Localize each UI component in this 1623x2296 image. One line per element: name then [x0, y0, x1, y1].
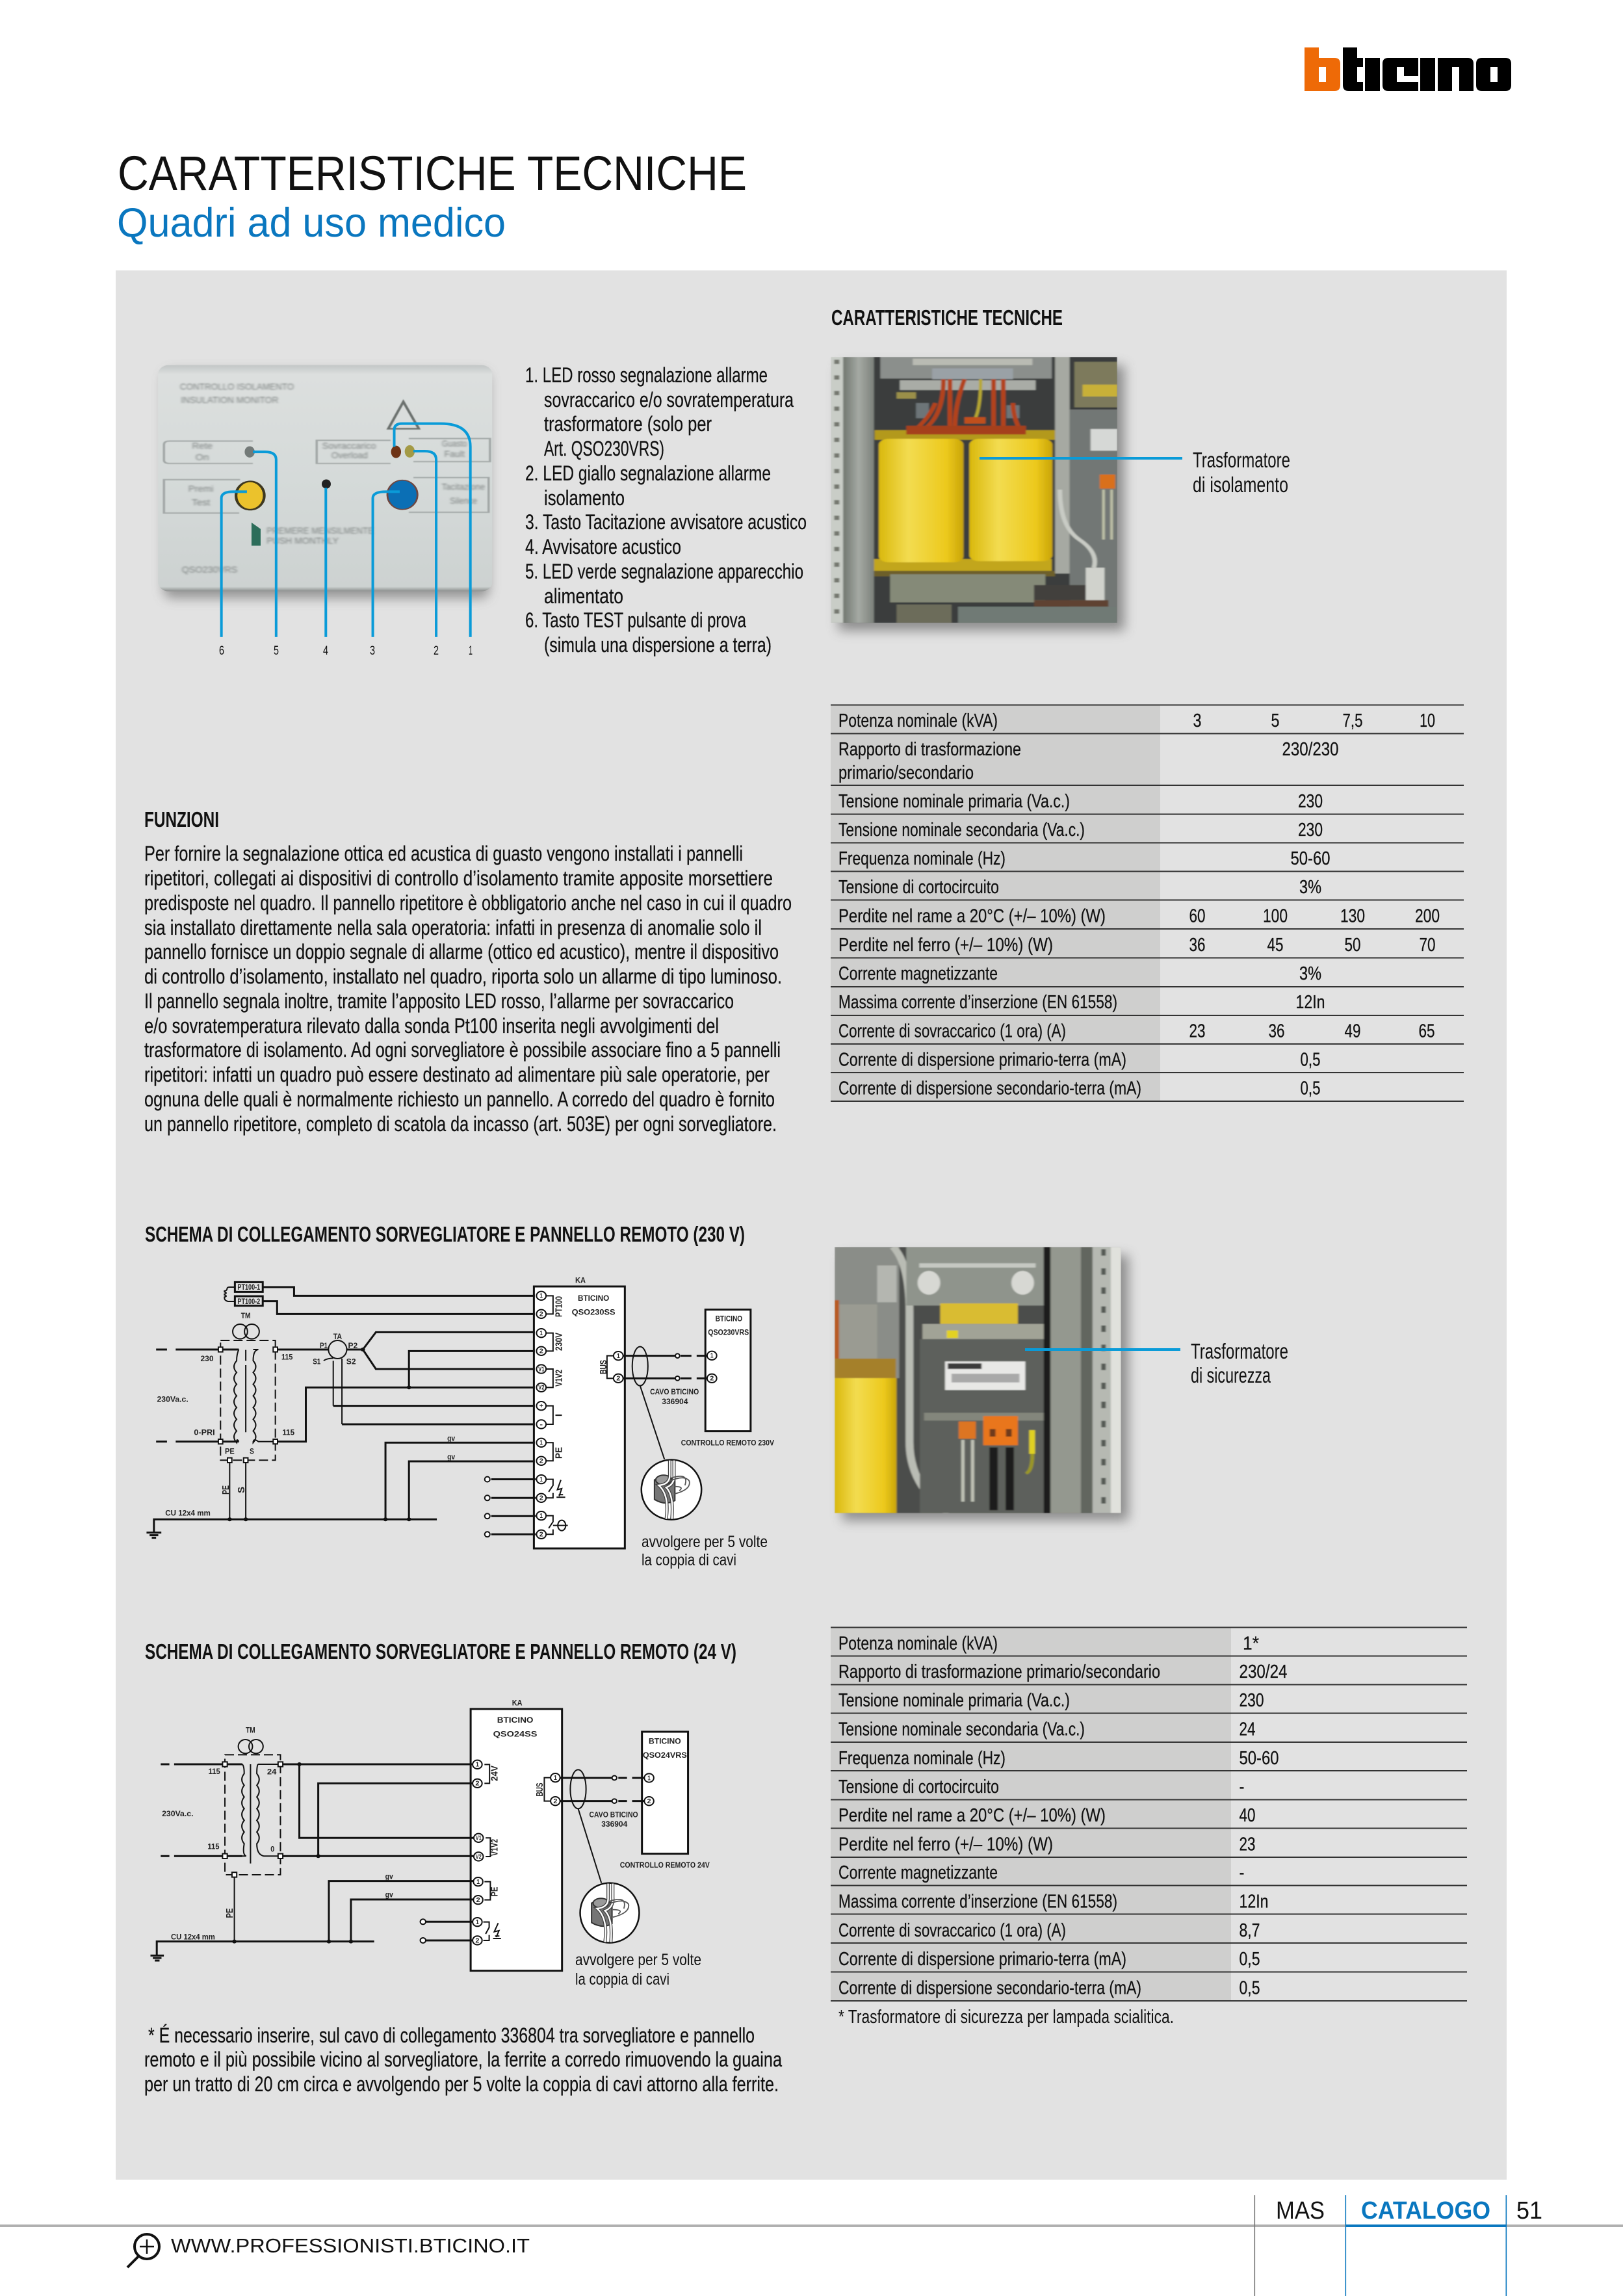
table: isolation transformer specifications: 0,5 — [1300, 1078, 1321, 1099]
text block: numbered legend: (simula una dispersione a terra) — [544, 633, 772, 657]
table: isolation transformer specifications: Tensione nominale secondaria (Va.c.) — [838, 820, 1085, 841]
wiring diagram: 230 V: 2 — [539, 1348, 543, 1355]
wiring diagram: 24 V: 1 — [476, 1761, 479, 1768]
device photo: insulation monitor panel: Premi — [188, 484, 213, 494]
device photo: insulation monitor panel: PREMERE MENSILMENTE — [266, 526, 374, 536]
wiring diagram: 24 V: BTICINO — [649, 1736, 681, 1745]
table: safety transformer specifications: 0,5 — [1239, 1977, 1260, 1998]
device photo: insulation monitor panel: On — [196, 452, 209, 462]
table: isolation transformer specifications: 7,5 — [1343, 711, 1362, 731]
wiring diagram: 230 V: CU 12x4 mm — [165, 1509, 211, 1517]
wiring diagram: 230 V: - — [539, 1421, 543, 1428]
wiring diagram: 230 V: 1 — [539, 1439, 543, 1446]
wiring diagram: 24 V: 1 — [476, 1919, 479, 1926]
subtitle: Quadri ad uso medico — [117, 200, 506, 246]
table: safety transformer specifications: - — [1239, 1777, 1244, 1797]
wiring diagram: 230 V: 230 — [200, 1355, 214, 1363]
table: safety transformer specifications: Frequenza nominale (Hz) — [838, 1748, 1006, 1769]
table: isolation transformer specifications: 5 — [1271, 711, 1279, 731]
table: safety transformer specifications: 12In — [1239, 1892, 1269, 1912]
wiring diagram: 24 V: QSO24VRS — [643, 1751, 687, 1760]
callout: trasformatore di isolamento — [980, 448, 1290, 497]
wiring diagram: 24 V: 2 — [476, 1897, 480, 1904]
table: isolation transformer specifications: Frequenza nominale (Hz) — [838, 848, 1006, 869]
table: isolation transformer specifications: Rapporto di trasformazione — [838, 739, 1021, 760]
photo: isolation transformer — [831, 357, 1124, 631]
callout: trasformatore di sicurezza — [1025, 1339, 1288, 1387]
wiring diagram: 230 V: 230V — [554, 1333, 565, 1351]
table: safety transformer specifications: Corrente di dispersione primario-terra (mA) — [838, 1949, 1126, 1970]
device photo: insulation monitor panel: Rete — [192, 441, 213, 451]
heading: caratteristiche tecniche: CARATTERISTICHE TECNICHE — [831, 306, 1063, 330]
table: isolation transformer specifications: Tensione nominale primaria (Va.c.) — [838, 791, 1070, 812]
wiring diagram: 24 V: 1 — [476, 1879, 480, 1886]
callout numbers: 5 — [274, 644, 279, 658]
table: isolation transformer specifications: 23 — [1189, 1021, 1205, 1041]
wiring diagram: 24 V: V1V2 — [489, 1839, 500, 1856]
table: safety transformer specifications: Corrente di dispersione secondario-terra (mA) — [838, 1977, 1141, 1998]
wiring diagram: 24 V: 0 — [270, 1845, 274, 1853]
table: safety transformer specifications: 230/24 — [1239, 1662, 1287, 1682]
table: isolation transformer specifications — [831, 705, 1464, 1101]
table: safety transformer specifications: Tensione nominale secondaria (Va.c.) — [838, 1719, 1085, 1740]
device photo: insulation monitor panel: INSULATION MONITOR — [181, 395, 278, 405]
wiring diagram: 24 V: 1 — [647, 1775, 651, 1782]
text block: funzioni: trasformatore di isolamento. Ad ogni sorvegliatore è possibile associare fino a 5 pannelli — [144, 1038, 781, 1062]
wiring diagram: 230 V: P2 — [348, 1342, 357, 1350]
wiring diagram: 230 V: 2 — [710, 1375, 714, 1382]
wiring diagram: 230 V: 2 — [539, 1531, 543, 1538]
wiring diagram: 24 V: TM — [246, 1726, 255, 1734]
wiring diagram: 24 V: CAVO BTICINO — [589, 1810, 638, 1819]
wiring diagram: 24 V: 115 — [207, 1842, 220, 1851]
text block: funzioni: ripetitori: infatti un quadro può essere destinato ad alimentare più sale operatorie, per — [144, 1063, 770, 1086]
text block: numbered legend: trasformatore (solo per — [544, 412, 712, 436]
table: isolation transformer specifications: 50-60 — [1291, 848, 1330, 869]
text block: cable note: remoto e il più possibile vicino al sorvegliatore, la ferrite a corredo rimuovendo la guaina — [144, 2048, 782, 2071]
wiring diagram: 230 V: 0-PRI — [194, 1428, 215, 1437]
wiring diagram: 24 V: avvolgere per 5 volte — [575, 1951, 701, 1969]
wiring diagram: 24 V: la coppia di cavi — [575, 1970, 669, 1989]
wiring diagram: 24 V: 2 — [475, 1780, 480, 1787]
wiring diagram: 230 V: 115 — [282, 1428, 294, 1437]
wiring diagram: 24 V: 115 — [209, 1767, 220, 1776]
text block: numbered legend: sovraccarico e/o sovratemperatura — [544, 388, 794, 411]
wiring diagram: 24 V: PE — [224, 1909, 235, 1918]
wiring diagram: 230 V: PT100-2 — [237, 1298, 260, 1306]
wiring diagram: 230 V: avvolgere per 5 volte — [642, 1533, 768, 1551]
text block: numbered legend: 2. LED giallo segnalazione allarme — [525, 462, 771, 485]
panel: grey background — [116, 270, 1507, 2180]
wiring diagram: 230 V: 1 — [710, 1352, 714, 1359]
wiring diagram: 230 V: QSO230SS — [572, 1308, 616, 1316]
logo: bticino — [1305, 47, 1511, 91]
table: safety transformer specifications: 24 — [1239, 1719, 1256, 1740]
wiring diagram: 230 V: 115 — [281, 1353, 293, 1362]
footer: MAS — [1276, 2197, 1325, 2224]
device photo: insulation monitor panel: Guasto — [442, 439, 467, 449]
table: safety transformer specifications: 23 — [1239, 1834, 1256, 1855]
wiring diagram: 24 V: QSO24SS — [493, 1730, 538, 1738]
device photo: insulation monitor panel: PUSH MONTHLY — [266, 536, 339, 546]
wiring diagram: 230 V: 1 — [539, 1292, 543, 1299]
text block: numbered legend: isolamento — [544, 486, 625, 510]
table: isolation transformer specifications: 45 — [1267, 935, 1283, 956]
wiring diagram: 24 V: 2 — [475, 1937, 480, 1944]
wiring diagram: 230 V: V1 — [538, 1366, 545, 1373]
table: isolation transformer specifications: 200 — [1415, 906, 1440, 927]
wiring diagram: 230 V: S1 — [313, 1357, 320, 1366]
text block: funzioni: Per fornire la segnalazione ottica ed acustica di guasto vengono installati i pannelli — [144, 842, 743, 865]
wiring diagram: 230 V: BUS — [598, 1360, 609, 1374]
text block: funzioni: predisposte nel quadro. Il pannello ripetitore è obbligatorio anche nel caso in cui il quadro — [144, 891, 792, 915]
wiring diagram: 230 V: CAVO BTICINO — [650, 1388, 699, 1396]
wiring diagram: 24 V: 2 — [553, 1798, 557, 1805]
wiring diagram: 230 V: TM — [241, 1312, 250, 1320]
wiring diagram: 230 V: 230Va.c. — [157, 1396, 188, 1404]
footer url: WWW.PROFESSIONISTI.BTICINO.IT — [171, 2234, 530, 2257]
wiring diagram: 24 V: gv — [385, 1872, 393, 1881]
table: safety transformer specifications: 1* — [1243, 1633, 1259, 1654]
text block: numbered legend: 4. Avvisatore acustico — [525, 535, 681, 558]
wiring diagram: 230 V: + — [539, 1403, 543, 1409]
device photo: insulation monitor panel: Silence — [450, 496, 477, 506]
text block: funzioni — [144, 842, 792, 1136]
wiring diagram: 230 V: V1V2 — [554, 1370, 565, 1387]
device photo: insulation monitor panel: QSO230VRS — [182, 565, 237, 575]
callout numbers: 2 — [434, 644, 439, 658]
table: safety transformer specifications: Rapporto di trasformazione primario/secondario — [838, 1662, 1160, 1682]
callout leader lines: device — [222, 424, 471, 637]
wiring diagram: 230 V: 336904 — [662, 1398, 688, 1406]
table: safety transformer specifications — [831, 1627, 1467, 2001]
wiring diagram: 24 V: 230Va.c. — [162, 1809, 194, 1818]
table: safety transformer specifications: 50-60 — [1239, 1748, 1279, 1769]
text block: numbered legend — [525, 363, 807, 657]
table: isolation transformer specifications: Perdite nel ferro (+/– 10%) (W) — [838, 935, 1053, 956]
text block: numbered legend: Art. QSO230VRS) — [544, 437, 664, 460]
footer: CATALOGO — [1361, 2197, 1490, 2224]
wiring diagram: 230 V: S2 — [346, 1357, 356, 1366]
text block: numbered legend: alimentato — [544, 584, 623, 608]
heading: schema 24 V: SCHEMA DI COLLEGAMENTO SORVEGLIATORE E PANNELLO REMOTO (24 V) — [145, 1639, 736, 1663]
table: isolation transformer specifications: Massima corrente d’inserzione (EN 61558) — [838, 992, 1117, 1013]
table: isolation transformer specifications: 3 — [1193, 711, 1201, 731]
wiring diagram: 230 V — [146, 1276, 774, 1569]
wiring diagram: 24 V: BTICINO — [497, 1715, 533, 1725]
text: CONTROLLO REMOTO 230V — [681, 1439, 774, 1447]
table: isolation transformer specifications: 36 — [1189, 935, 1205, 956]
text block: funzioni: Il pannello segnala inoltre, tramite l’apposito LED rosso, l’allarme per sovraccarico — [144, 989, 734, 1013]
table: safety transformer specifications: 8,7 — [1239, 1920, 1260, 1941]
table: safety transformer specifications: Tensione di cortocircuito — [838, 1777, 999, 1797]
table: isolation transformer specifications: Corrente di sovraccarico (1 ora) (A) — [838, 1021, 1066, 1041]
icon: ferrite winding — [642, 1460, 701, 1520]
callout numbers: 4 — [323, 644, 328, 658]
wiring diagram: 230 V: 1 — [617, 1353, 620, 1360]
wiring diagram: 230 V: 2 — [539, 1311, 543, 1318]
footer — [0, 2195, 1623, 2296]
table: safety transformer specifications: Perdite nel rame a 20°C (+/– 10%) (W) — [838, 1805, 1106, 1826]
text block: funzioni: ognuna delle quali è normalmente richiesto un pannello. A corredo del quadro è fornito — [144, 1088, 775, 1111]
table: isolation transformer specifications: Corrente di dispersione secondario-terra (mA) — [838, 1078, 1141, 1099]
wiring diagram: 24 V: 24V — [489, 1766, 500, 1781]
table: isolation transformer specifications: 230 — [1298, 791, 1323, 812]
wiring diagram: 230 V: gv — [447, 1435, 455, 1443]
table: safety transformer specifications: - — [1239, 1862, 1244, 1883]
wiring diagram: 24 V: V2 — [476, 1853, 482, 1860]
wiring diagram: 230 V: 2 — [539, 1457, 543, 1465]
wiring diagram: 24 V: gv — [385, 1890, 393, 1899]
heading: funzioni: FUNZIONI — [144, 807, 219, 831]
wiring diagram: 230 V: BTICINO — [716, 1315, 742, 1324]
table: isolation transformer specifications: 100 — [1263, 906, 1288, 927]
table: safety transformer specifications: Potenza nominale (kVA) — [838, 1633, 998, 1654]
table: isolation transformer specifications: 65 — [1418, 1021, 1435, 1041]
wiring diagram: 24 V: 336904 — [601, 1820, 627, 1829]
table: safety transformer specifications: 0,5 — [1239, 1949, 1260, 1970]
callout numbers: 1 — [469, 644, 473, 658]
wiring diagram: 230 V: P1 — [320, 1342, 328, 1350]
wiring diagram: 24 V: 2 — [647, 1798, 651, 1805]
device photo: insulation monitor panel: Fault — [444, 449, 465, 460]
text block: numbered legend: 3. Tasto Tacitazione avvisatore acustico — [525, 510, 807, 534]
photo: safety transformer — [835, 1247, 1128, 1520]
wiring diagram: 230 V: PE — [220, 1485, 231, 1494]
table: safety transformer specifications: Massima corrente d’inserzione (EN 61558) — [838, 1892, 1117, 1912]
table: isolation transformer specifications: Potenza nominale (kVA) — [838, 711, 998, 731]
table: safety transformer specifications: Corrente magnetizzante — [838, 1862, 998, 1883]
text block: cable note: per un tratto di 20 cm circa e avvolgendo per 5 volte la coppia di cavi attorno alla ferrite. — [144, 2072, 779, 2096]
wiring diagram: 230 V: V2 — [538, 1384, 544, 1391]
icon: ferrite winding — [580, 1883, 639, 1943]
wiring diagram: 230 V: 1 — [539, 1476, 543, 1483]
text block: funzioni: un pannello ripetitore, completo di scatola da incasso (art. 503E) per ogni sorvegliatore. — [144, 1112, 777, 1136]
wiring diagram: 230 V: PE — [554, 1447, 565, 1459]
table: isolation transformer specifications: 230 — [1298, 820, 1323, 841]
wiring diagram: 24 V: 24 — [267, 1768, 277, 1776]
callout: trasformatore di isolamento: Trasformatore — [1193, 448, 1290, 472]
device photo: insulation monitor panel: Tacitazione — [441, 482, 485, 492]
wiring diagram: 230 V: PE — [225, 1447, 235, 1455]
wiring diagram: 24 V: V1 — [476, 1834, 482, 1842]
wiring diagram: 230 V: S — [236, 1487, 247, 1493]
table: isolation transformer specifications: Perdite nel rame a 20°C (+/– 10%) (W) — [838, 906, 1106, 927]
device photo: insulation monitor panel: Test — [192, 498, 211, 508]
table: isolation transformer specifications: 10 — [1420, 711, 1435, 731]
wiring diagram: 24 V: 1 — [554, 1775, 557, 1782]
table: isolation transformer specifications: 70 — [1420, 935, 1435, 956]
table: isolation transformer specifications: primario/secondario — [838, 763, 974, 783]
callout numbers: 3 — [370, 644, 375, 658]
text block: funzioni: pannello fornisce un doppio segnale di allarme (ottico ed acustico), mentre il dispositivo — [144, 940, 779, 963]
table: isolation transformer specifications: 130 — [1340, 906, 1365, 927]
table: isolation transformer specifications: Tensione di cortocircuito — [838, 877, 999, 898]
wiring diagram: 230 V: 1 — [539, 1330, 543, 1337]
callout: trasformatore di sicurezza: di sicurezza — [1191, 1363, 1271, 1387]
table: isolation transformer specifications: Corrente magnetizzante — [838, 963, 998, 984]
text block: funzioni: sia installato direttamente nella sala operatoria: infatti in presenza di anomalie solo il — [144, 916, 762, 939]
wiring diagram: 230 V: PT100-1 — [237, 1283, 260, 1292]
text: CONTROLLO REMOTO 24V — [620, 1860, 710, 1870]
table: safety transformer specifications: Tensione nominale primaria (Va.c.) — [838, 1690, 1070, 1711]
icon: magnifier — [127, 2234, 159, 2267]
wiring diagram: 230 V: TA — [333, 1333, 342, 1341]
text block: numbered legend: 5. LED verde segnalazione apparecchio — [525, 560, 803, 583]
wiring diagram: 24 V: PE — [489, 1886, 500, 1897]
table: isolation transformer specifications: 36 — [1269, 1021, 1284, 1041]
callout: trasformatore di sicurezza: Trasformatore — [1191, 1339, 1288, 1363]
wiring diagram: 230 V: la coppia di cavi — [642, 1551, 736, 1569]
text block: funzioni: ripetitori, collegati ai dispositivi di controllo d’isolamento tramite apposite morsettiere — [144, 867, 773, 890]
device photo: insulation monitor panel: CONTROLLO ISOLAMENTO — [180, 382, 294, 392]
callout numbers — [219, 644, 473, 658]
table footnote: * Trasformatore di sicurezza per lampada scialitica. — [838, 2007, 1174, 2028]
device photo: insulation monitor panel — [158, 365, 492, 598]
wiring diagram: 230 V: I — [554, 1414, 565, 1416]
wiring diagram: 230 V: gv — [447, 1453, 455, 1461]
text block: funzioni: e/o sovratemperatura rilevato dalla sonda Pt100 inserita negli avvolgimenti del — [144, 1014, 719, 1037]
footer: 51 — [1516, 2197, 1542, 2224]
wiring diagram: 24 V: CU 12x4 mm — [171, 1932, 215, 1941]
table: safety transformer specifications: 230 — [1239, 1690, 1264, 1711]
callout numbers: 6 — [219, 644, 224, 658]
text block: numbered legend: 1. LED rosso segnalazione allarme — [525, 363, 768, 387]
table: safety transformer specifications: 40 — [1239, 1805, 1256, 1826]
table: isolation transformer specifications: 50 — [1344, 935, 1361, 956]
title: CARATTERISTICHE TECNICHE — [118, 146, 747, 200]
table: isolation transformer specifications: 60 — [1189, 906, 1205, 927]
wiring diagram: 230 V: BTICINO — [578, 1294, 609, 1303]
table: isolation transformer specifications: 12In — [1296, 992, 1325, 1013]
device photo: insulation monitor panel: Overload — [331, 450, 368, 461]
table: safety transformer specifications: Perdite nel ferro (+/– 10%) (W) — [838, 1834, 1053, 1855]
callout: trasformatore di isolamento: di isolamento — [1193, 473, 1288, 497]
wiring diagram: 230 V: 2 — [539, 1494, 543, 1502]
text block: numbered legend: 6. Tasto TEST pulsante di prova — [525, 608, 746, 632]
device photo: insulation monitor panel: Sovraccarico — [322, 441, 376, 451]
wiring diagram: 230 V: QSO230VRS — [708, 1329, 749, 1337]
table: isolation transformer specifications: 230/230 — [1282, 739, 1339, 760]
text block: funzioni: di controllo d’isolamento, installato nel quadro, riporta solo un allarme di tipo luminoso. — [144, 965, 782, 988]
wiring diagram: 230 V: PT100 — [554, 1296, 565, 1317]
wiring diagram: 230 V: 2 — [616, 1375, 620, 1382]
wiring diagram: 230 V: S — [250, 1447, 254, 1455]
text block: cable note: * É necessario inserire, sul cavo di collegamento 336804 tra sorvegliatore e pannello — [148, 2024, 755, 2047]
table: isolation transformer specifications: 49 — [1344, 1021, 1361, 1041]
heading: schema 230 V: SCHEMA DI COLLEGAMENTO SORVEGLIATORE E PANNELLO REMOTO (230 V) — [145, 1222, 745, 1246]
wiring diagram: 24 V: KA — [512, 1698, 523, 1707]
wiring diagram: 230 V: 1 — [539, 1513, 543, 1519]
wiring diagram: 24 V — [151, 1698, 710, 1989]
text block: cable note — [144, 2024, 782, 2096]
table: isolation transformer specifications: Corrente di dispersione primario-terra (mA) — [838, 1049, 1126, 1070]
table: isolation transformer specifications: 3% — [1299, 963, 1321, 984]
table: isolation transformer specifications: 0,5 — [1300, 1049, 1321, 1070]
wiring diagram: 24 V: BUS — [534, 1782, 545, 1797]
wiring diagram: 230 V: KA — [575, 1276, 586, 1285]
table: safety transformer specifications: Corrente di sovraccarico (1 ora) (A) — [838, 1920, 1066, 1941]
table: isolation transformer specifications: 3% — [1299, 877, 1321, 898]
